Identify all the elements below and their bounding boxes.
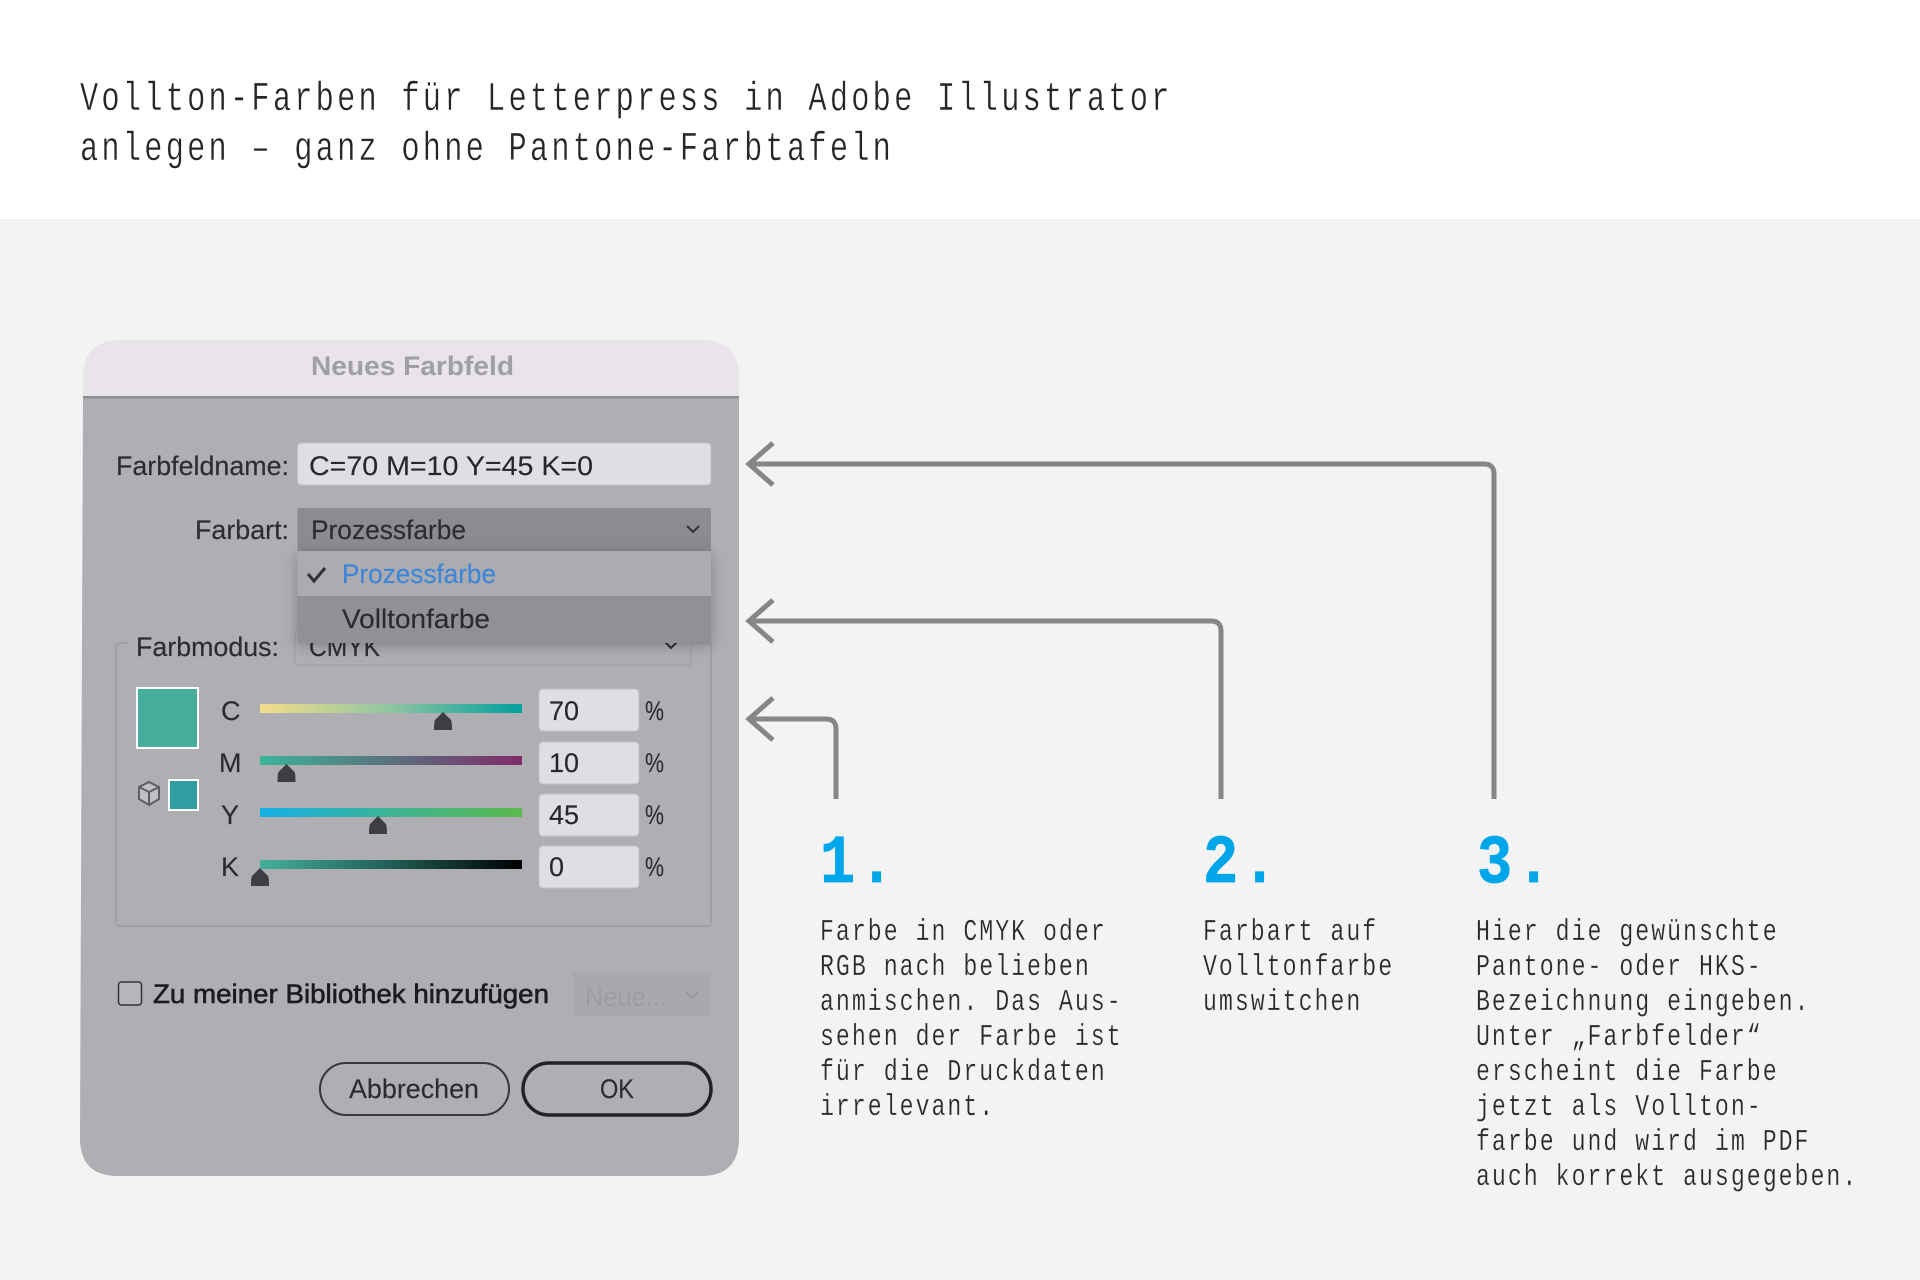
text 3: Pantone- oder HKS- — [1476, 950, 1763, 985]
text 2: Farbart auf — [1203, 915, 1378, 950]
button: OK: OK — [600, 1074, 634, 1104]
label: Farbfeldname: Farbfeldname: — [116, 451, 289, 481]
step 3 — [1476, 826, 1858, 1195]
number 2: 2. — [1203, 826, 1281, 904]
step 1 — [820, 826, 1123, 1125]
arrow: step 2 to Farbart — [749, 600, 1221, 799]
title: anlegen – ganz ohne Pantone-Farbtafeln — [80, 126, 894, 173]
slider: M: 10 — [549, 748, 579, 778]
panel: dialog Neues Farbfeld — [80, 340, 739, 1176]
text 2 — [1203, 915, 1394, 1020]
text 3: Bezeichnung eingeben. — [1476, 985, 1810, 1020]
select: Farbart: Prozessfarbe — [311, 515, 466, 545]
dropdown menu — [298, 551, 711, 643]
swatch: large colour — [137, 688, 198, 748]
text 1: sehen der Farbe ist — [820, 1020, 1123, 1055]
slider: C — [221, 689, 664, 731]
dialog body — [80, 397, 739, 1176]
text 1 — [820, 915, 1123, 1125]
slider: Y: % — [645, 800, 664, 830]
text 3: Hier die gewünschte — [1476, 915, 1779, 950]
arrow: step 1 to sliders — [749, 698, 836, 799]
title: Vollton-Farben für Letterpress in Adobe Illustrator — [80, 76, 1173, 123]
input: Farbfeldname: C=70 M=10 Y=45 K=0 — [309, 451, 593, 481]
slider: C: C — [221, 696, 240, 726]
text 3: erscheint die Farbe — [1476, 1055, 1779, 1090]
text 1: irrelevant. — [820, 1090, 995, 1125]
select: Farbart — [298, 508, 711, 552]
step 2 — [1203, 826, 1394, 1020]
button: Abbrechen — [320, 1063, 509, 1115]
text 3: auch korrekt ausgegeben. — [1476, 1160, 1858, 1195]
button: Abbrechen: Abbrechen — [349, 1074, 479, 1104]
select: CMYK — [295, 630, 691, 665]
slider: C: 70 — [549, 696, 579, 726]
slider: M: M — [219, 748, 242, 778]
slider: K: % — [645, 852, 664, 882]
input: Farbfeldname — [298, 443, 711, 485]
checkbox: Zu meiner Bibliothek hinzufügen: Zu meiner Bibliothek hinzufügen — [153, 979, 549, 1009]
text 2: Volltonfarbe — [1203, 950, 1394, 985]
arrow: step 3 to Farbfeldname — [749, 443, 1494, 799]
text 1: Farbe in CMYK oder — [820, 915, 1107, 950]
dialog title bar — [83, 340, 739, 397]
menu item: Prozessfarbe — [298, 551, 711, 596]
text 1: anmischen. Das Aus- — [820, 985, 1123, 1020]
slider: K: 0 — [549, 852, 564, 882]
select: Neue (disabled): Neue... — [585, 982, 667, 1012]
slider: Y — [221, 794, 664, 836]
group box: Farbmodus — [116, 630, 711, 926]
text 3: Unter „Farbfelder“ — [1476, 1020, 1763, 1055]
button: OK — [523, 1063, 711, 1115]
slider: K — [221, 846, 664, 888]
text 2: umswitchen — [1203, 985, 1362, 1020]
title — [80, 76, 1173, 173]
text 1: RGB nach belieben — [820, 950, 1091, 985]
icon: cube — [139, 782, 159, 805]
slider: Y: 45 — [549, 800, 579, 830]
number 1: 1. — [820, 826, 898, 904]
text 1: für die Druckdaten — [820, 1055, 1107, 1090]
slider: M: % — [645, 748, 664, 778]
menu item: Volltonfarbe — [298, 596, 711, 643]
label: Farbart: Farbart: — [195, 515, 289, 545]
swatch: small colour — [169, 780, 198, 810]
label: Farbmodus: Farbmodus: — [136, 632, 279, 662]
menu item: Volltonfarbe: Volltonfarbe — [342, 604, 490, 634]
slider: M — [219, 742, 664, 784]
text 3: jetzt als Vollton- — [1476, 1090, 1763, 1125]
select: Neue (disabled) — [573, 972, 711, 1016]
slider: Y: Y — [221, 800, 239, 830]
text 3: farbe und wird im PDF — [1476, 1125, 1810, 1160]
select: CMYK: CMYK — [309, 632, 380, 662]
text 3 — [1476, 915, 1858, 1195]
slider: C: % — [645, 696, 664, 726]
slider: K: K — [221, 852, 239, 882]
number 3: 3. — [1477, 826, 1555, 904]
menu item: Prozessfarbe: Prozessfarbe — [342, 559, 496, 589]
dialog title text: Neues Farbfeld — [311, 351, 514, 381]
